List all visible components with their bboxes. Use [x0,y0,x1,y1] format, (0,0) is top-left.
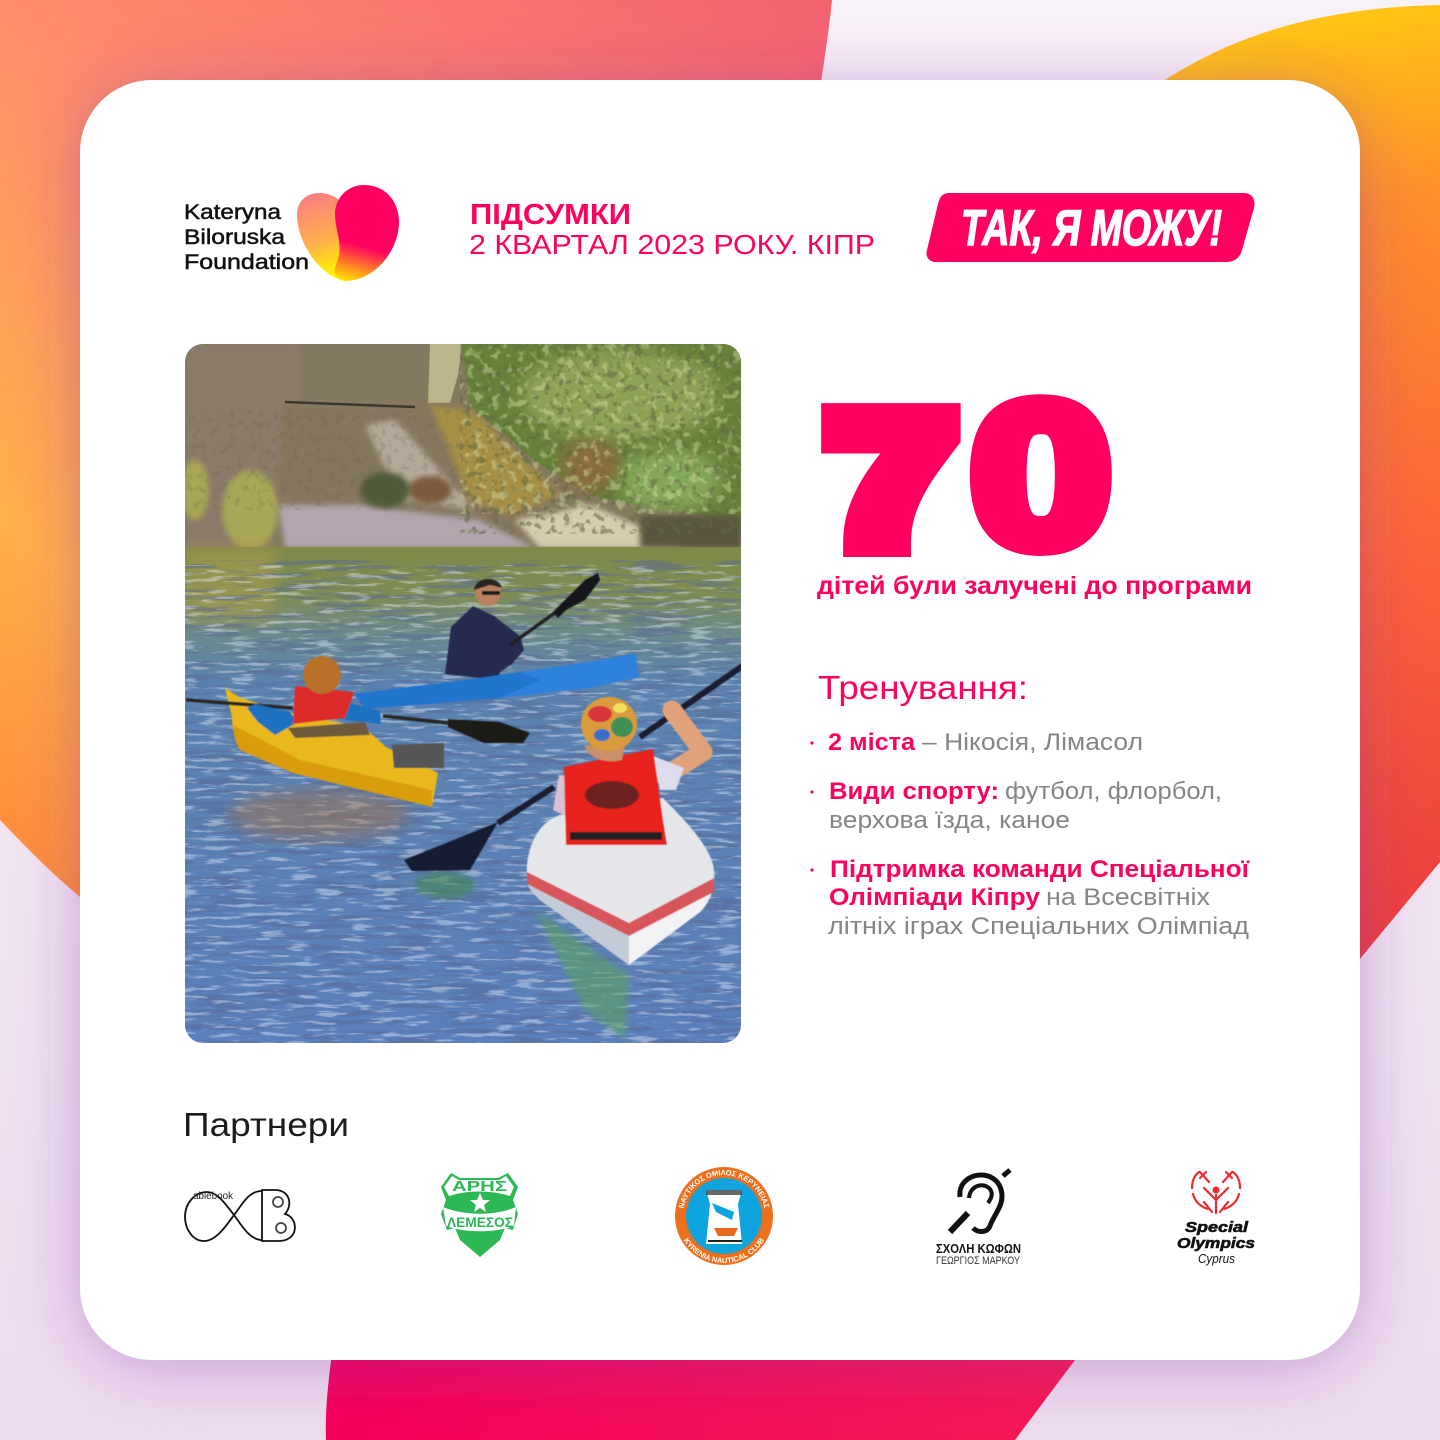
partner logo: ablebook [185,1190,295,1241]
blob: top-left salmon and orange shape [0,0,832,897]
photo yellow kayak with child [186,656,530,807]
partner logo: Georgios Markou School for the Deaf [936,1170,1021,1267]
logo heart back lobe [297,193,360,281]
caption: children involved: дітей були залучені до програми [817,572,1252,600]
photo white kayak with child [404,665,744,965]
big number: 70: 7 [830,380,952,581]
logo wordmark: Biloruska [184,226,285,249]
bullet: sports: Види спорту: [829,778,999,805]
bullet: cities: – Нікосія, Лімасол [922,729,1143,756]
list: training facts [810,729,1250,940]
logo wordmark: Kateryna [184,201,281,224]
bullet: sports: верхова їзда, каное [829,807,1070,834]
partner logo: Georgios Markou School for the Deaf: ΣΧΟΛΗ ΚΩΦΩΝ [936,1242,1021,1256]
partner logo: Special Olympics Cyprus: Cyprus [1198,1252,1235,1266]
logo wordmark [184,201,309,274]
panel: white card [80,80,1360,1360]
heading: summary period [469,199,875,260]
bullet: Special Olympics support: літніх іграх Спеціальних Олімпіад [828,913,1249,940]
heading: summary period: 2 КВАРТАЛ 2023 РОКУ. КІПР [469,229,875,260]
bullet: Special Olympics support: Олімпіади Кіпру [829,884,1041,911]
bullet: cities: 2 міста [828,729,916,756]
partner logo: Kyrenia Nautical Club [675,1167,773,1265]
logo: Kateryna Biloruska Foundation [184,185,399,281]
heading: Партнери: Партнери [183,1106,349,1143]
blob: bottom pink shape [326,1340,1090,1440]
bullet: sports [810,778,1222,834]
heading: Тренування: Тренування: [818,669,1028,706]
partner logo: Aris Limassol: ΛΕΜΕΣΟΣ [447,1215,513,1230]
partner logo: ablebook: ablebook [193,1191,234,1202]
partner logo: Kyrenia Nautical Club: KYRENIA NAUTICAL CLUB [684,1238,764,1263]
logo wordmark: Foundation [184,251,309,274]
partner logo: Special Olympics Cyprus: Olympics [1177,1236,1255,1252]
blob: right yellow to red shape [1165,5,1440,965]
photo: children kayaking on a lake [181,344,744,1043]
heading: summary period: ПІДСУМКИ [470,199,631,231]
logo heart front lobe [334,185,399,281]
partner logo: Georgios Markou School for the Deaf: ΓΕΩΡΓΙΟΣ ΜΑΡΚΟΥ [936,1255,1021,1267]
partner logo: Kyrenia Nautical Club: ΝΑΥΤΙΚΟΣ ΟΜΙΛΟΣ ΚΕΡΥΝΕΙΑΣ [678,1170,770,1208]
partner logo: Aris Limassol [441,1173,518,1257]
badge: Так, я можу: ТАК, Я МОЖУ! [961,200,1222,256]
bullet: Special Olympics support [810,856,1250,940]
photo hillside [181,344,741,554]
partner logo: Aris Limassol: ΑΡΗΣ [452,1178,507,1195]
partner logo: Special Olympics Cyprus: Special [1185,1220,1249,1236]
photo blue kayak with instructor [354,573,639,709]
big number: 70: 0 [971,362,1111,589]
bullet: Special Olympics support: Підтримка команди Спеціальної [830,856,1250,883]
big number: 70 [830,362,1111,589]
bullet: cities [810,729,1143,756]
bullet: sports: футбол, флорбол, [1005,778,1222,805]
bullet: Special Olympics support: на Всесвітніх [1046,884,1210,911]
photo lake water [185,547,741,1043]
partner logo: Special Olympics Cyprus [1177,1172,1255,1266]
badge: Так, я можу [926,193,1255,262]
